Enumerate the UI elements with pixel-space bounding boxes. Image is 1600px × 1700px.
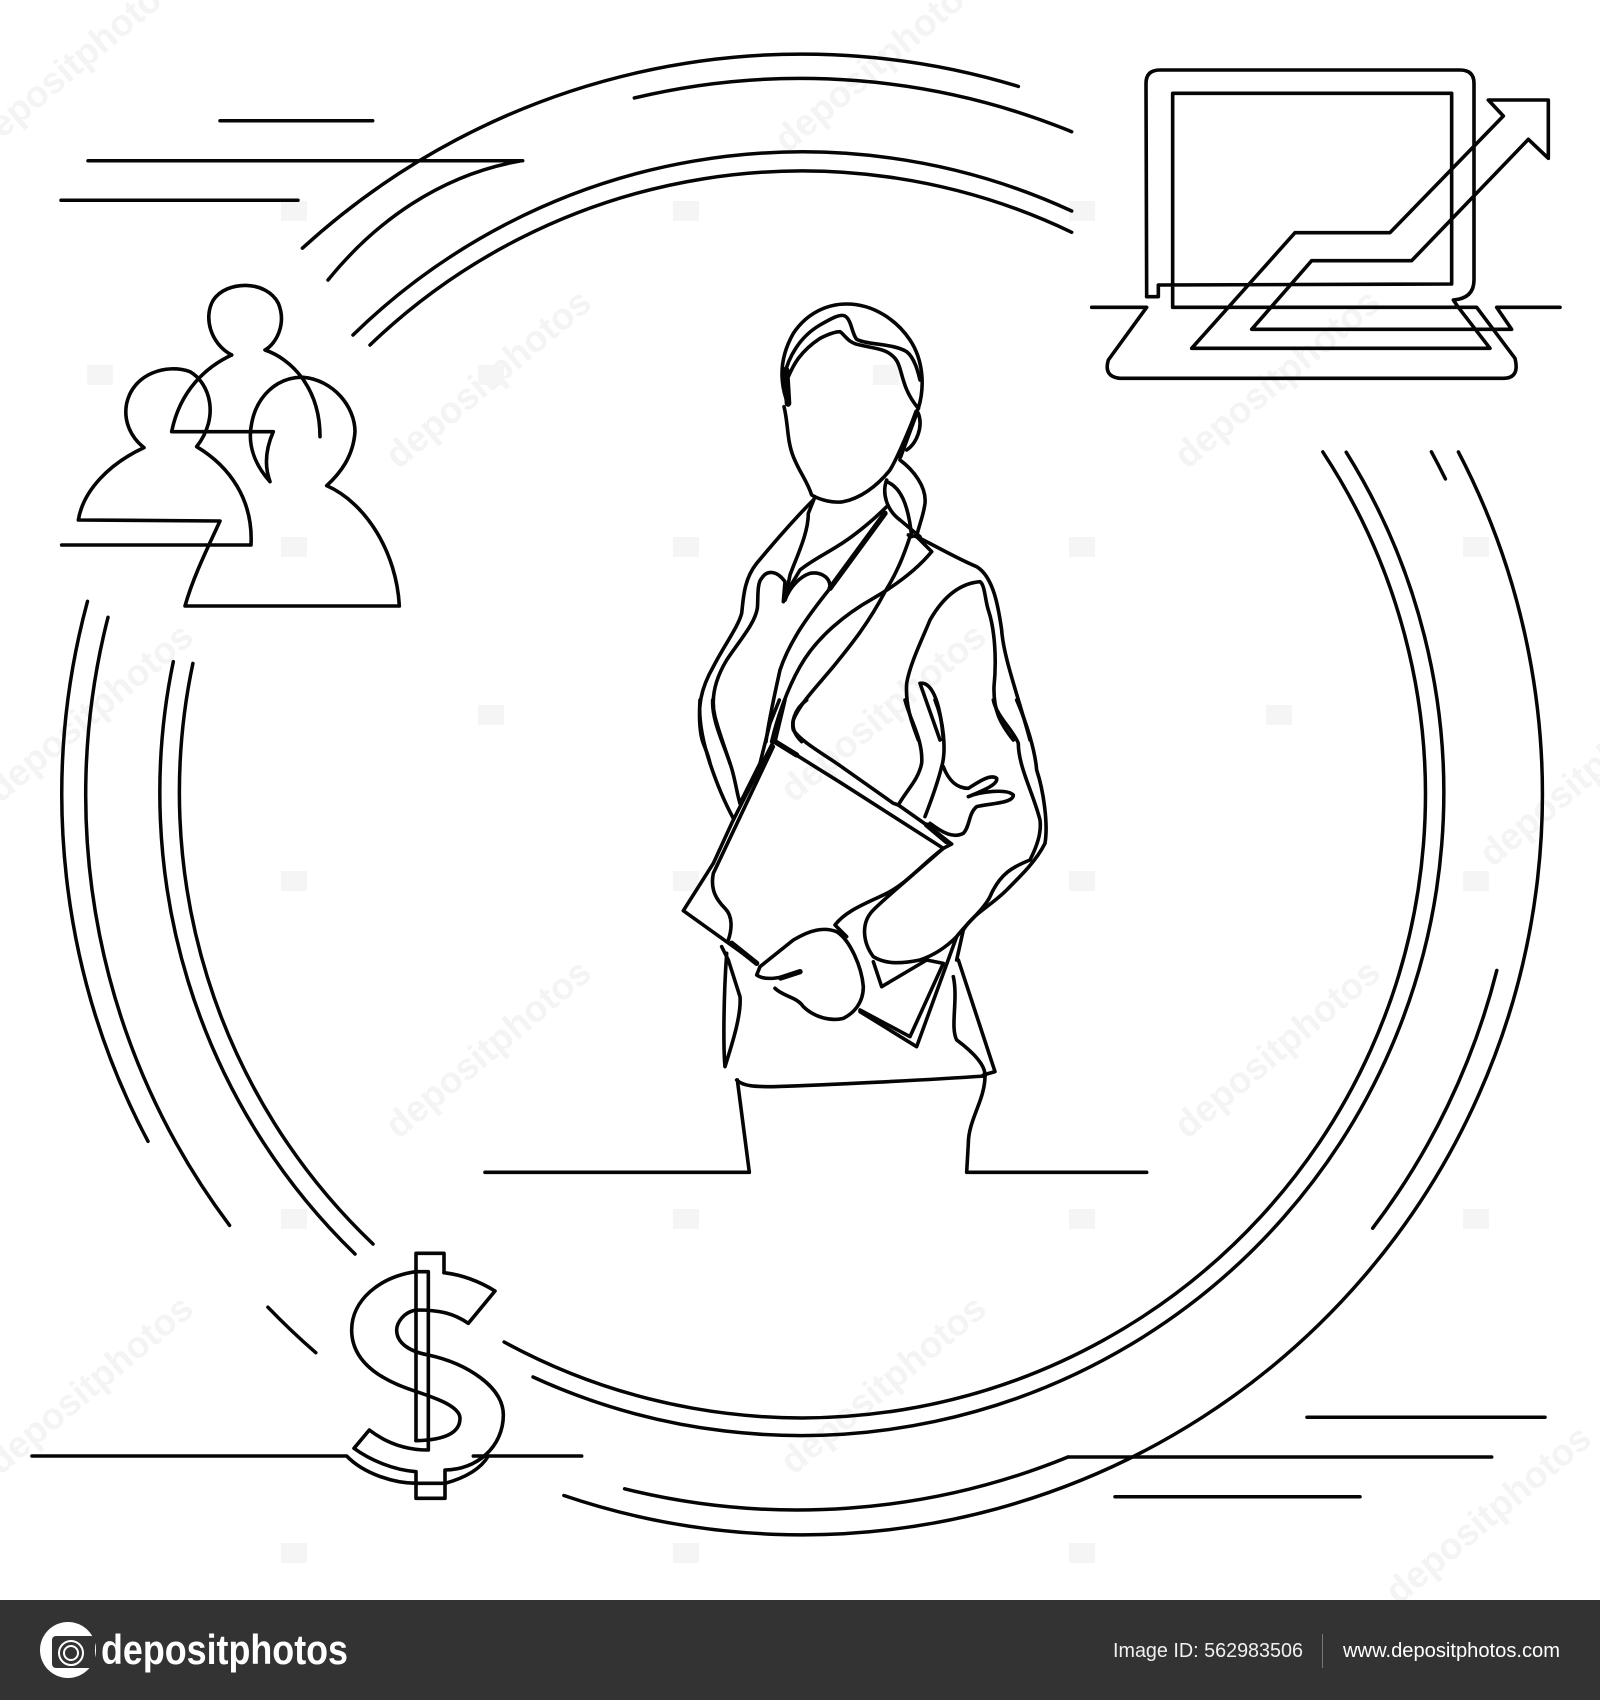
figure: businesswoman upper body [699,304,1030,763]
logo wordmark: depositphotos [101,1626,348,1673]
jacket, collar and hand at chest [699,497,1030,763]
logo: camera badge [40,1622,96,1678]
watermark pattern: depositphotos [1166,281,1388,476]
folder [683,700,957,1047]
fist holding folder [757,929,863,1019]
icon: group of people [62,285,399,606]
right arm and hand [835,700,1046,963]
divider [1322,1634,1323,1668]
torso sides [700,700,785,818]
hair and face [782,304,925,537]
watermark pattern: depositphotos [1377,1417,1599,1612]
website: www.depositphotos.com [1342,1640,1560,1662]
watermark pattern: depositphotos [377,281,599,476]
watermark pattern: depositphotos [772,615,994,810]
image id: Image ID: 562983506 [1113,1640,1303,1662]
horizontal speed lines [61,121,1545,1497]
watermark pattern: depositphotos [377,951,599,1146]
watermark pattern: depositphotos [1166,951,1388,1146]
watermark pattern: depositphotos [772,1287,994,1482]
skirt and legs [485,947,1147,1172]
figure: businesswoman lower body with folder [485,700,1147,1172]
footer bar [0,1600,1600,1700]
icon: dollar sign [32,1253,582,1498]
icon: laptop with rising arrow [1092,70,1560,378]
